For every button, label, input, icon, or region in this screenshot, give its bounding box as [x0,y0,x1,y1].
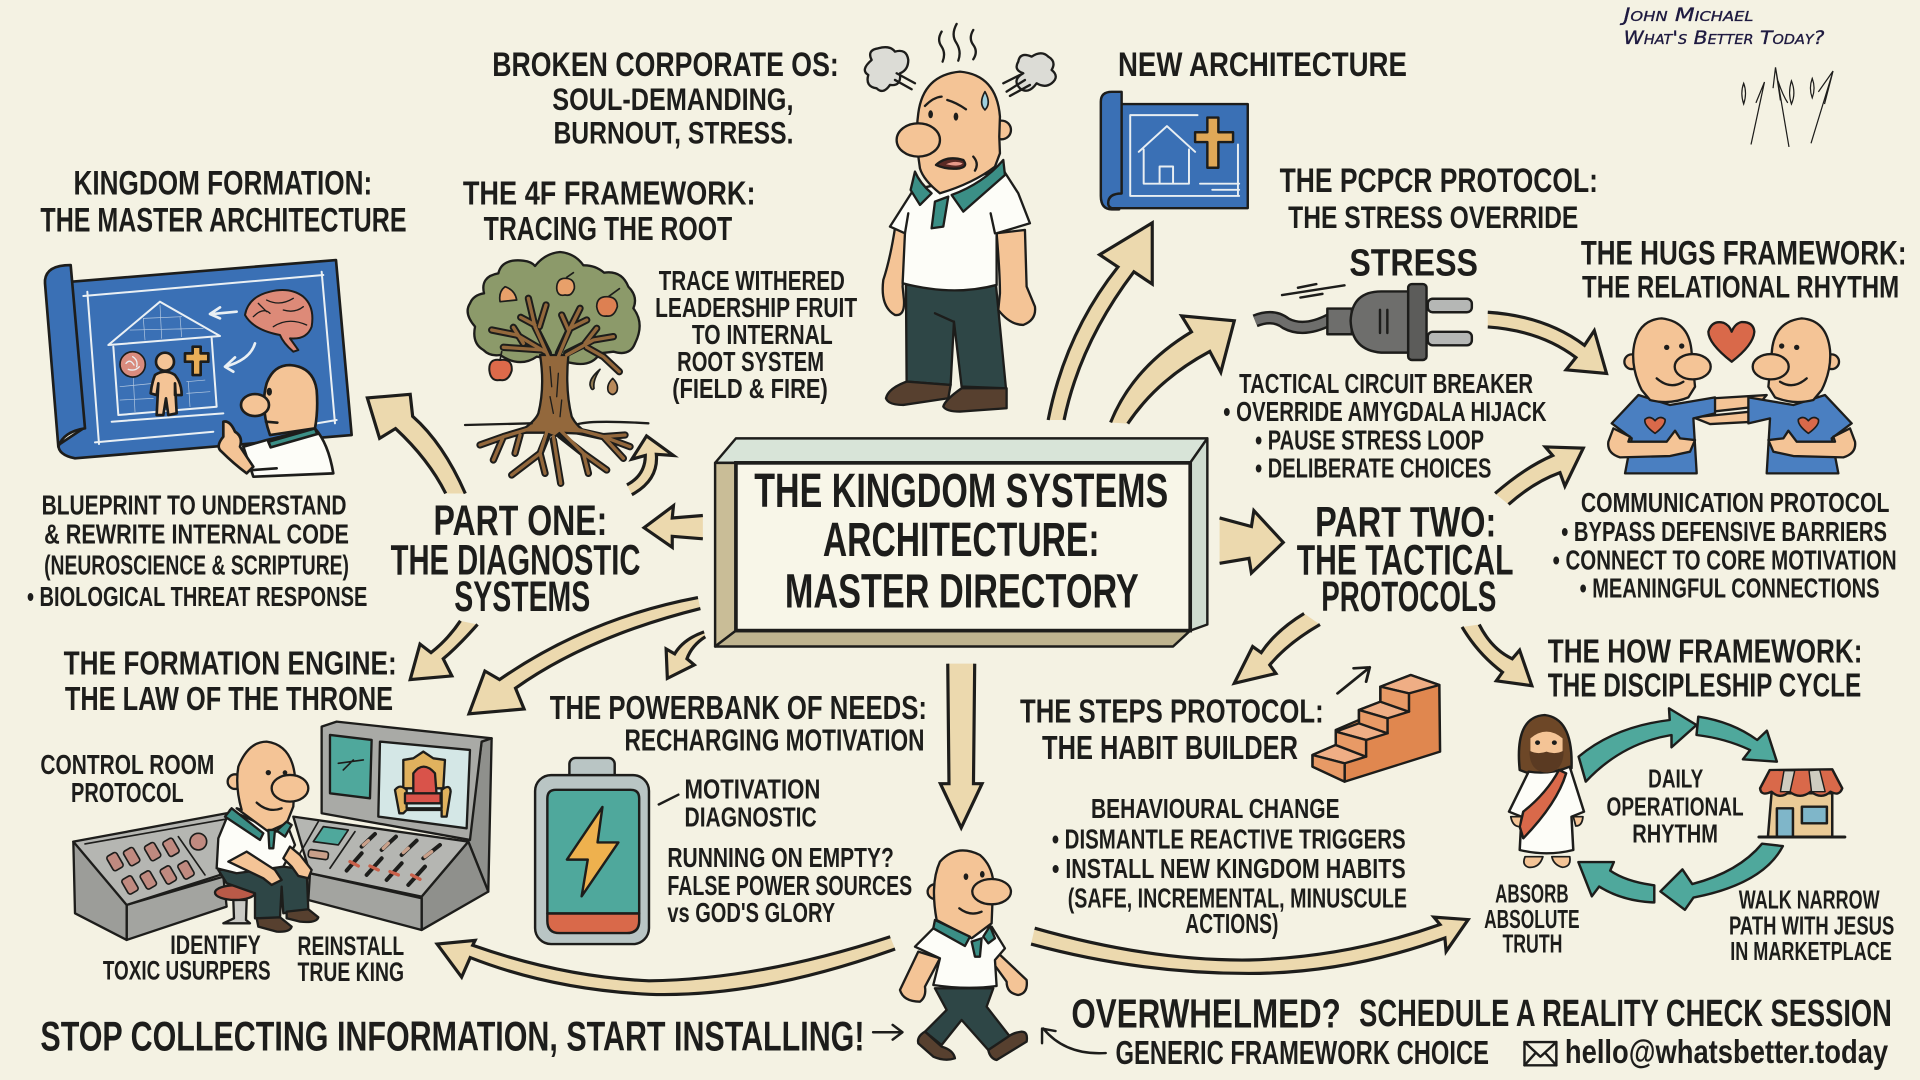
icon: heart [1708,322,1754,362]
ear and head [228,774,242,789]
arms [900,952,940,1002]
shoes [886,382,951,405]
heading: HOW Framework [1548,633,1862,705]
trousers [925,988,1010,1050]
heading: Part One: PART ONE: [433,497,607,545]
arrow: centre to Powerbank [666,632,705,678]
head [917,72,1000,193]
fruit [557,278,574,295]
arms [883,227,907,315]
panel: central title box: MASTER DIRECTORY [785,565,1139,618]
signature: John Michael: John Michael [1619,5,1753,26]
text: trace withered fruit: TO INTERNAL [692,319,833,350]
heading: HUGS Framework [1581,234,1907,305]
text: daily operational rhythm: OPERATIONAL [1607,794,1744,822]
text: absorb absolute truth: TRUTH [1502,931,1562,959]
icon: two people hugging [1608,318,1855,473]
text: running on empty: FALSE POWER SOURCES [667,870,912,901]
icon: orange stairs [1313,667,1440,782]
reaching arms [1712,395,1767,412]
icon: shop [1768,793,1832,837]
arrow: centre to Part Two [1220,511,1283,573]
text: tactical circuit breaker: • PAUSE STRESS LOOP [1255,424,1484,455]
shirt [915,927,1005,988]
text: tactical circuit breaker: • OVERRIDE AMYGDALA HIJACK [1223,396,1547,427]
icon: plug [1255,284,1472,360]
chart: discipleship cycle arrows [1509,708,1845,910]
collar [933,920,995,957]
text: tactical circuit breaker [1223,368,1547,484]
text: tactical circuit breaker: • DELIBERATE CHOICES [1255,453,1491,484]
heading: Formation Engine: THE LAW OF THE THRONE [65,681,393,718]
text: running on empty [667,842,912,928]
collar [911,160,1005,228]
panel: central title box: THE KINGDOM SYSTEMS [754,465,1168,518]
heading: Formation Engine: THE FORMATION ENGINE: [64,646,397,683]
text: control room protocol: CONTROL ROOM [40,749,214,780]
arrow: Part One to 4F tree [627,436,673,495]
panel: central title box [715,438,1207,647]
text: reinstall true king: TRUE KING [298,957,404,987]
text: daily operational rhythm [1607,765,1744,848]
shoes [257,909,318,932]
text: behavioural change: ACTIONS) [1185,908,1278,939]
text: behavioural change: • DISMANTLE REACTIVE TRIGGERS [1052,824,1406,855]
branches outline [480,298,630,483]
text: blueprint description: • BIOLOGICAL THREAT RESPONSE [27,581,367,612]
heading: Part One: SYSTEMS [454,573,590,621]
collar [225,808,292,848]
text: tactical circuit breaker: TACTICAL CIRCUIT BREAKER [1239,368,1533,399]
text: control room protocol: PROTOCOL [71,777,184,808]
heading: Powerbank of Needs: RECHARGING MOTIVATION [624,724,924,758]
text: daily operational rhythm: DAILY [1648,765,1703,793]
throne [403,752,445,788]
icon: kingdom blueprint with man [45,260,352,477]
heading: 4F Framework: TRACING THE ROOT [484,211,732,248]
trousers [906,285,1006,388]
heading: Broken Corporate OS: BURNOUT, STRESS. [553,114,793,150]
seated man trousers [218,867,308,918]
text: motivation diagnostic: MOTIVATION [684,773,820,804]
heading: Part One [391,497,640,621]
text: communication protocol [1553,487,1897,604]
heading: Kingdom Formation: THE MASTER ARCHITECTURE [40,201,407,239]
heading: Powerbank of Needs [550,690,927,758]
text: running on empty: vs GOD'S GLORY [667,897,835,928]
heading: Powerbank of Needs: THE POWERBANK OF NEEDS: [550,690,927,727]
heading: Steps Protocol [1020,693,1324,767]
text: behavioural change: • INSTALL NEW KINGDOM HABITS [1052,853,1406,884]
text: control room protocol [40,749,214,808]
heading: PCPCR Protocol: STRESS [1349,243,1478,285]
blueprint house [108,302,223,422]
heading: New Architecture: NEW ARCHITECTURE [1118,46,1407,84]
heading: Part Two: THE TACTICAL [1297,536,1513,584]
arrow: centre to PCPCR plug [1111,316,1234,424]
text: reinstall true king: REINSTALL [298,931,404,961]
icon: battery [535,758,649,944]
trunk [518,355,588,437]
arrow: Part Two to HOW [1462,624,1532,686]
text: trace withered fruit: LEADERSHIP FRUIT [655,292,857,323]
panel: central title box: ARCHITECTURE: [823,514,1100,567]
text: trace withered fruit: TRACE WITHERED [659,265,845,296]
text: behavioural change [1052,793,1407,939]
text: identify toxic usurpers [103,930,271,986]
heading: Part One: THE DIAGNOSTIC [391,536,640,584]
text: behavioural change: BEHAVIOURAL CHANGE [1091,793,1340,824]
heading: Broken Corporate OS: SOUL-DEMANDING, [552,81,793,117]
callout: overwhelmed reality check: OVERWHELMED? [1071,990,1341,1036]
arrow: centre to Part One [644,506,703,547]
heading: PCPCR Protocol: THE STRESS OVERRIDE [1288,199,1578,235]
heading: Steps Protocol: THE STEPS PROTOCOL: [1020,693,1324,730]
heading: Part Two: PART TWO: [1315,498,1496,546]
steam clouds [865,47,1056,91]
text: identify toxic usurpers: TOXIC USURPERS [103,956,271,986]
text: walk narrow path [1729,887,1894,966]
ear and head [928,884,942,899]
shirt [217,810,295,873]
arrow: plug to HUGS [1488,312,1607,373]
arrow: centre to New Architecture [1048,223,1152,420]
text: blueprint description: (NEUROSCIENCE & SCRIPTURE) [44,549,349,580]
heading: Steps Protocol: THE HABIT BUILDER [1042,730,1298,767]
shirt [890,170,1030,290]
text: daily operational rhythm: RHYTHM [1632,820,1718,848]
heading: Kingdom Formation [40,165,407,239]
arrow: Part Two to HUGS [1495,447,1583,504]
face [928,110,933,118]
text: identify toxic usurpers: IDENTIFY [170,930,261,960]
text: motivation diagnostic [684,773,820,833]
left console [127,877,227,940]
text: trace withered fruit: ROOT SYSTEM [677,346,824,377]
nose [897,123,940,157]
ground line [465,422,648,425]
stool [223,900,250,923]
icon: stressed man [865,24,1056,412]
man at blueprint [243,428,333,477]
arrow: walking man to discipleship cycle [1031,917,1468,973]
text: motivation diagnostic: DIAGNOSTIC [684,802,817,833]
icon: control room with man [73,722,492,940]
branches fill [480,298,630,483]
text: blueprint description: BLUEPRINT TO UNDERSTAND [42,489,347,520]
leader line [659,795,678,804]
signature: John Michael [1619,5,1825,49]
blueprint figure [156,353,174,371]
heading: 4F Framework: THE 4F FRAMEWORK: [463,175,756,212]
text: blueprint description [27,489,367,612]
icon: tree with roots [465,252,648,483]
arrow: Part One to Formation Engine [410,621,478,680]
text: absorb absolute truth: ABSOLUTE [1484,906,1580,934]
icon: signature sketch [1742,67,1833,147]
heading: Formation Engine [64,646,397,718]
right console [422,842,488,930]
heading: Part Two: PROTOCOLS [1321,573,1496,621]
icon: small blueprint [1101,92,1248,209]
heading: PCPCR Protocol: THE PCPCR PROTOCOL: [1280,162,1598,200]
text: absorb absolute truth [1484,880,1580,959]
text: absorb absolute truth: ABSORB [1495,880,1569,908]
shoes [918,1032,955,1060]
arrow: Part One to Kingdom Formation [367,394,465,493]
heading: Broken Corporate OS [492,46,839,150]
heading: Broken Corporate OS: BROKEN CORPORATE OS: [492,46,839,84]
text: running on empty: RUNNING ON EMPTY? [667,842,894,873]
arrow: Part Two to STEPS [1234,613,1320,683]
right person [1748,318,1855,473]
arrow: walking man to control room [437,937,895,995]
arrow: centre to control room [469,598,700,714]
heading: 4F Framework [463,175,756,248]
callout: stop collecting information: STOP COLLECTING INFORMATION, START INSTALLING! [40,1013,864,1060]
icon: brain [245,290,312,352]
signature: John Michael: What's Better Today? [1624,28,1825,49]
icon: envelope [1524,1042,1556,1065]
heading: Part Two [1297,498,1513,621]
arrow: centre down to walking man [940,664,982,828]
heading: PCPCR Protocol [1280,162,1598,285]
ear [992,121,1011,139]
text: blueprint description: & REWRITE INTERNAL CODE [44,519,349,550]
text: reinstall true king [298,931,404,987]
text: trace withered fruit: (FIELD & FIRE) [672,373,828,404]
monitor housing [468,738,492,892]
text: behavioural change: (SAFE, INCREMENTAL, MINUSCULE [1068,882,1407,913]
callout: overwhelmed reality check: GENERIC FRAMEWORK CHOICE [1116,1035,1489,1072]
icon: Jesus figure [1519,715,1572,775]
callout: overwhelmed reality check [1042,990,1892,1072]
heading: Kingdom Formation: KINGDOM FORMATION: [73,165,372,203]
icon: walking man [900,850,1027,1060]
left person [1608,318,1715,473]
text: trace withered fruit [655,265,857,404]
